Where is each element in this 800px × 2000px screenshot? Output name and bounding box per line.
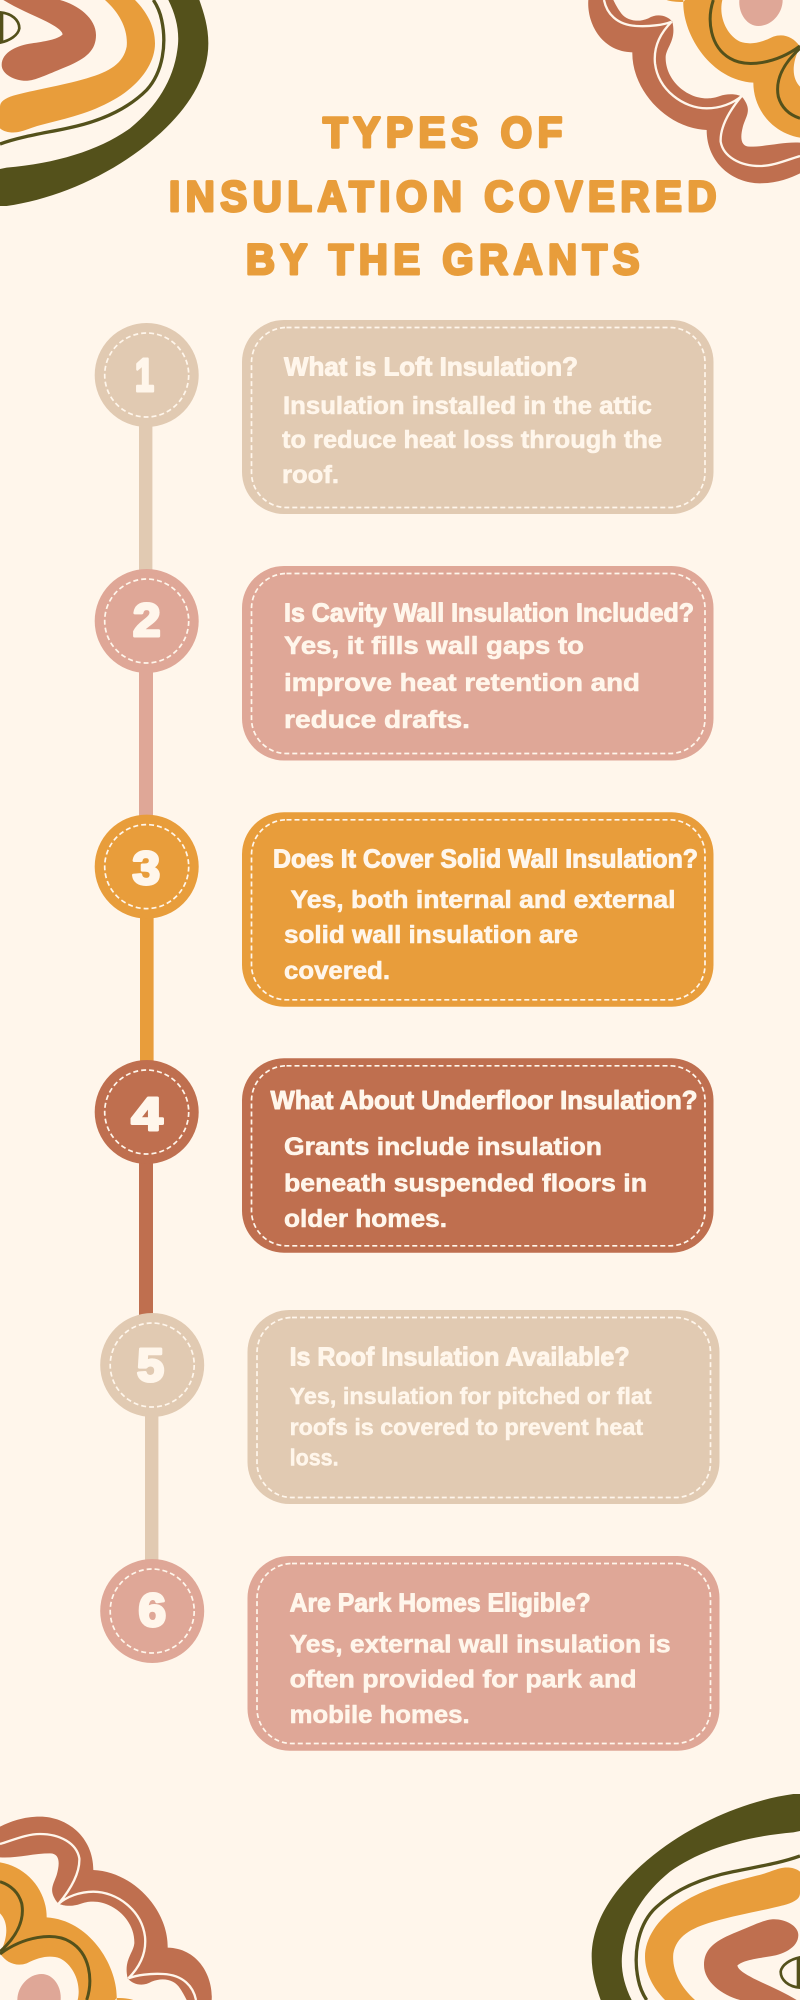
number badge 2 <box>95 569 199 673</box>
panel: underfloor insulation: What About Underfloor Insulation? <box>270 1085 698 1115</box>
panel: park homes <box>248 1556 720 1751</box>
number badge 1 <box>95 323 199 427</box>
panel: solid wall insulation: Yes, both internal and external <box>290 886 676 914</box>
panel: roof insulation: roofs is covered to prevent heat <box>290 1414 643 1440</box>
panel: roof insulation: loss. <box>290 1444 339 1470</box>
decoration: top-left rainbow arcs <box>0 0 208 206</box>
timeline connector 4 <box>139 1158 153 1318</box>
number badge 5: 5 <box>137 1339 164 1391</box>
panel: park homes: Yes, external wall insulation is <box>290 1630 671 1658</box>
panel: cavity wall insulation <box>242 566 714 760</box>
timeline connector 1 <box>139 420 152 575</box>
step 1 <box>95 320 713 514</box>
number badge 5 <box>100 1313 204 1417</box>
step 4 <box>95 1058 713 1253</box>
title: TYPES OF <box>323 109 568 157</box>
panel: park homes: mobile homes. <box>290 1701 470 1729</box>
panel: cavity wall insulation: Yes, it fills wall gaps to <box>284 632 584 660</box>
panel: solid wall insulation: solid wall insulation are <box>284 921 578 949</box>
panel: loft insulation: to reduce heat loss through the <box>282 426 662 454</box>
panel: underfloor insulation: beneath suspended floors in <box>284 1170 647 1198</box>
panel: cavity wall insulation: improve heat retention and <box>284 669 640 697</box>
title: INSULATION COVERED <box>169 173 722 221</box>
title <box>169 109 722 284</box>
panel: roof insulation: Is Roof Insulation Available? <box>290 1342 630 1372</box>
panel: solid wall insulation: Does It Cover Solid Wall Insulation? <box>273 844 698 874</box>
decoration: bottom-right rainbow arcs <box>592 1794 800 2000</box>
number badge 4: 4 <box>132 1088 163 1140</box>
decoration: bottom-left scalloped flower <box>0 1817 212 2000</box>
number badge 4 <box>95 1060 199 1164</box>
step 5 <box>100 1310 719 1504</box>
panel: solid wall insulation: covered. <box>284 957 390 985</box>
step 3 <box>95 812 713 1007</box>
timeline connector 3 <box>140 912 154 1064</box>
number badge 3: 3 <box>132 842 160 894</box>
panel: underfloor insulation: Grants include insulation <box>284 1133 602 1161</box>
panel: underfloor insulation <box>242 1058 714 1253</box>
panel: cavity wall insulation: Is Cavity Wall Insulation Included? <box>284 598 694 628</box>
decoration: top-right scalloped flower <box>588 0 800 183</box>
panel: loft insulation: What is Loft Insulation? <box>284 352 578 382</box>
panel: roof insulation <box>248 1310 720 1504</box>
number badge 6: 6 <box>138 1584 166 1636</box>
title: BY THE GRANTS <box>246 236 645 284</box>
panel: solid wall insulation <box>242 812 714 1007</box>
number badge 6 <box>100 1559 204 1663</box>
panel: loft insulation <box>242 320 714 514</box>
panel: park homes: Are Park Homes Eligible? <box>290 1588 591 1618</box>
panel: loft insulation: Insulation installed in the attic <box>283 392 652 420</box>
panel: loft insulation: roof. <box>282 461 339 489</box>
number badge 3 <box>95 815 199 919</box>
number badge 2: 2 <box>133 594 160 646</box>
step 6 <box>100 1556 719 1751</box>
panel: roof insulation: Yes, insulation for pitched or flat <box>290 1383 652 1409</box>
timeline connector 2 <box>139 665 153 820</box>
step 2 <box>95 566 713 760</box>
panel: cavity wall insulation: reduce drafts. <box>284 706 470 734</box>
timeline connector 5 <box>145 1410 158 1563</box>
number badge 1: 1 <box>135 349 154 401</box>
panel: underfloor insulation: older homes. <box>284 1205 447 1233</box>
panel: park homes: often provided for park and <box>290 1666 637 1694</box>
